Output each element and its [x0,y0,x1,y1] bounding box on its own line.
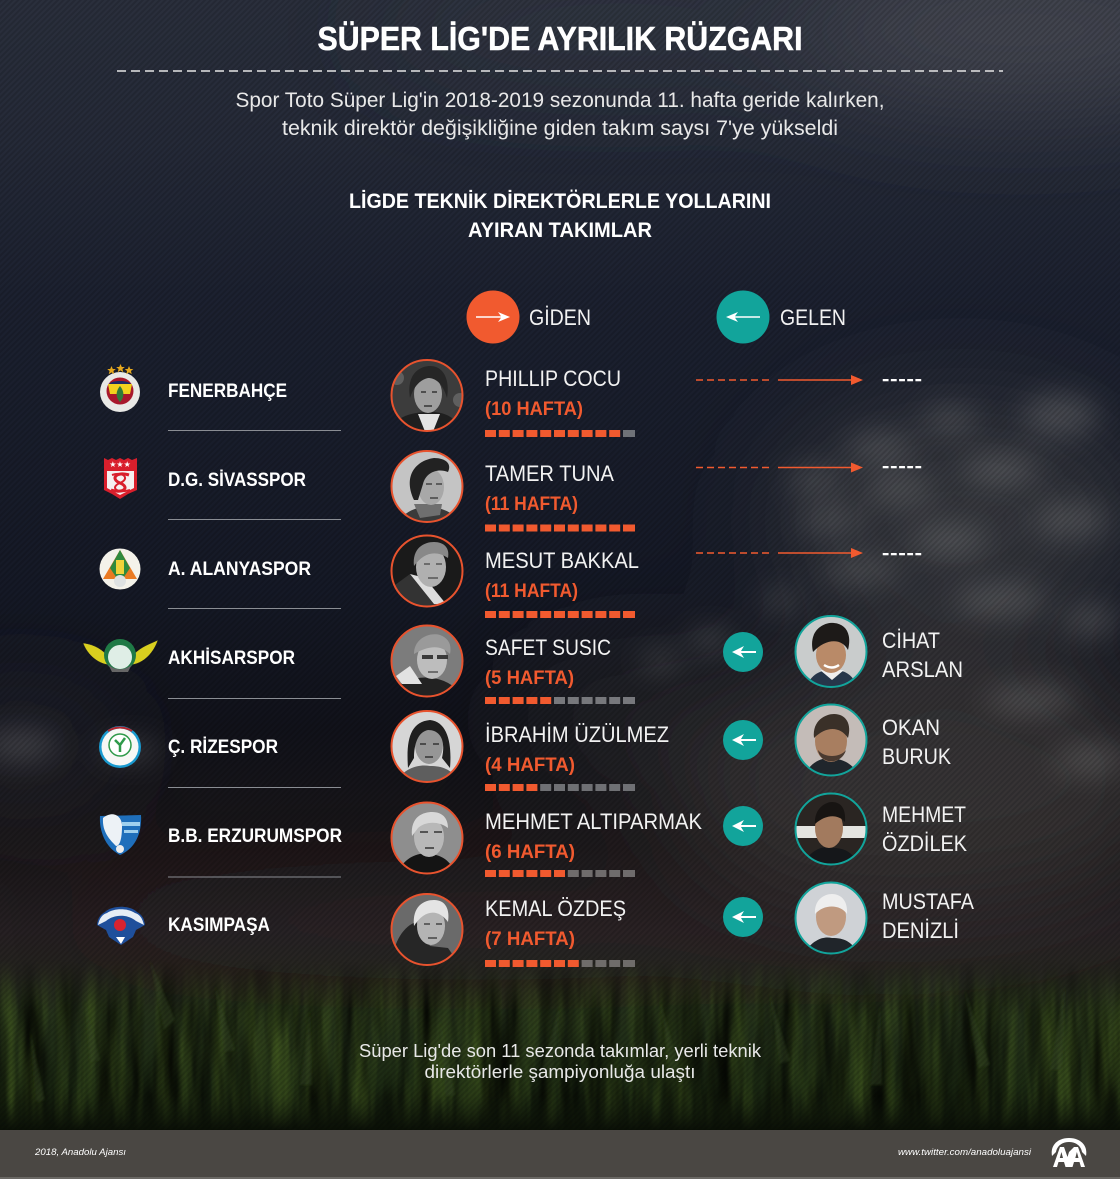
photo: Phillip Cocu [390,359,464,432]
outgoing coach names [485,366,702,921]
grass texture [0,974,1120,1124]
club names column: D.G. SİVASSPOR [168,470,306,491]
photo: Mehmet Altıparmak [392,802,462,874]
logo: Sivasspor: ★★★ [109,460,131,469]
section heading: LİGDE TEKNİK DİREKTÖRLERLE YOLLARINI [349,190,771,213]
outgoing coach names: MEHMET ALTIPARMAK [485,809,702,834]
tenure labels in weeks: (11 HAFTA) [485,494,578,515]
incoming coach names: OKAN [882,715,940,740]
club names column [168,381,342,936]
photo: İbrahim Üzülmez [392,711,462,784]
bottom note [359,1041,762,1082]
footer url: www.twitter.com/anadoluajansi [898,1147,1032,1158]
subtitle: Spor Toto Süper Lig'in 2018-2019 sezonunda 11. hafta geride kalırken, [236,89,884,112]
title: SÜPER LİG'DE AYRILIK RÜZGARI [318,20,802,57]
incoming coach names: MEHMET [882,802,966,827]
club names column: Ç. RİZESPOR [168,737,278,758]
incoming coach names: CİHAT [882,628,940,653]
subtitle: teknik direktör değişikliğine giden takım saysı 7'ye yükseldi [282,117,838,140]
incoming coach names: MUSTAFA [882,889,974,914]
empty replacement placeholders: ----- [882,540,922,565]
photo: Mesut Bakkal [392,536,462,610]
club names column: AKHİSARSPOR [168,648,295,669]
club names column: KASIMPAŞA [168,915,270,936]
section heading: AYIRAN TAKIMLAR [468,219,652,242]
tenure labels in weeks: (5 HAFTA) [485,668,574,689]
tenure labels in weeks: (6 HAFTA) [485,842,575,863]
arrows: no replacement rows [696,375,863,558]
footer credit: 2018, Anadolu Ajansı [34,1147,126,1158]
logo: Rizespor [99,726,141,768]
subtitle [236,89,884,140]
outgoing coach names: KEMAL ÖZDEŞ [485,896,626,921]
incoming coach names: ARSLAN [882,657,963,682]
club names column: B.B. ERZURUMSPOR [168,826,342,847]
outgoing coach names: MESUT BAKKAL [485,548,639,573]
section heading [349,190,771,242]
photo: Okan Buruk [796,704,866,778]
incoming coach names: ÖZDİLEK [882,831,967,856]
photo: Mustafa Denizli [796,882,866,958]
teal arrow: Rizespor [723,720,763,760]
incoming coach names: DENİZLİ [882,918,959,943]
bottom note: Süper Lig'de son 11 sezonda takımlar, yerli teknik [359,1041,762,1061]
logo: Fenerbahçe [100,364,140,412]
tenure labels in weeks: (4 HAFTA) [485,755,575,776]
logo: Akhisarspor [83,639,158,672]
footer bar [0,1130,1120,1179]
photo: Tamer Tuna [392,451,462,524]
photo: Cihat Arslan [796,616,866,690]
teal arrow: Akhisarspor [723,632,763,672]
legend: giden [466,290,591,344]
week progress bars [485,430,635,967]
legend: giden: GİDEN [529,305,591,330]
tenure labels in weeks [485,399,583,950]
teal arrow: Kasımpaşa [723,897,763,937]
tenure labels in weeks: (10 HAFTA) [485,399,583,420]
outgoing coach names: TAMER TUNA [485,461,614,486]
logo: Alanyaspor [100,548,140,590]
incoming coach names: BURUK [882,744,951,769]
empty replacement placeholders [882,366,922,565]
outgoing coach names: PHILLIP COCU [485,366,621,391]
outgoing coach names: İBRAHİM ÜZÜLMEZ [485,722,669,747]
teal arrow: Erzurumspor [723,806,763,846]
tenure labels in weeks: (7 HAFTA) [485,929,575,950]
legend: gelen [716,290,846,344]
legend: gelen: GELEN [780,305,846,330]
logo: Kasımpaşa [97,907,145,945]
logo: Sivasspor [104,458,137,499]
photo: Safet Susic [392,626,464,700]
photo: Kemal Özdeş [392,894,462,968]
tenure labels in weeks: (11 HAFTA) [485,581,578,602]
bottom note: direktörlerle şampiyonluğa ulaştı [424,1062,696,1082]
logo: Erzurumspor [100,814,141,855]
icon: Anadolu Agency logo [1052,1138,1086,1167]
empty replacement placeholders: ----- [882,453,922,478]
club names column: A. ALANYASPOR [168,559,311,580]
photo: Mehmet Özdilek [796,794,866,868]
incoming coach names [882,628,974,943]
club names column: FENERBAHÇE [168,381,287,402]
outgoing coach names: SAFET SUSIC [485,635,611,660]
empty replacement placeholders: ----- [882,366,922,391]
